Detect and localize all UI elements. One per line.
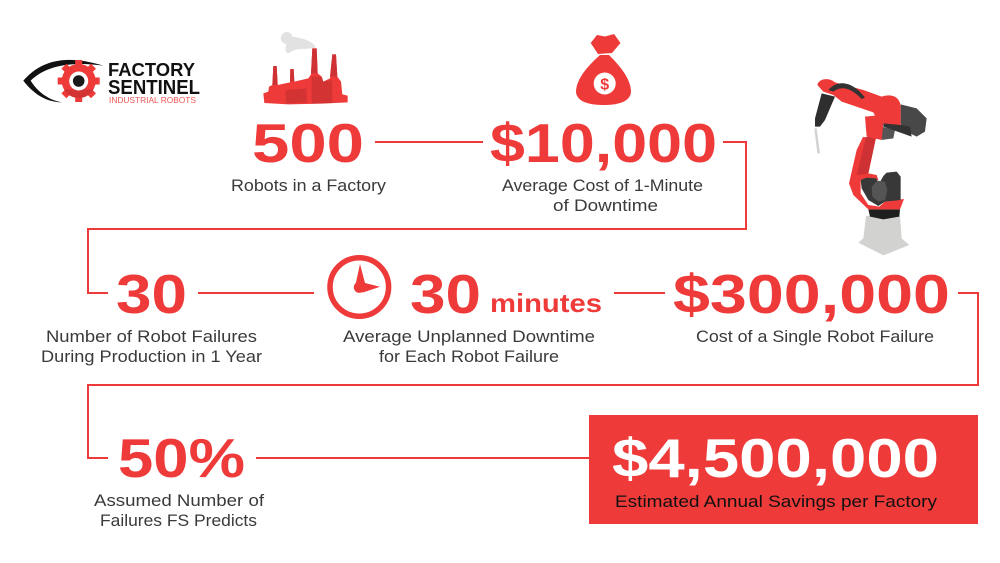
stat: 30 minutes: Average Unplanned Downtime — [343, 327, 595, 346]
stat: 30 minutes — [343, 263, 602, 366]
stat: $300,000 — [673, 263, 950, 346]
panel: estimated annual savings: Estimated Annual Savings per Factory — [615, 492, 938, 511]
icon: clock — [330, 258, 389, 316]
stat: 30 minutes: 30 — [410, 263, 481, 325]
stat: 30 failures — [41, 263, 262, 366]
logo: Factory Sentinel — [23, 60, 200, 105]
factory building — [263, 48, 348, 104]
stat: 30 minutes: for Each Robot Failure — [379, 347, 559, 366]
logo: Factory Sentinel: SENTINEL — [108, 77, 200, 99]
stat: 50%: Assumed Number of — [94, 491, 264, 510]
icon: money bag — [576, 34, 631, 105]
stat: 30 failures: Number of Robot Failures — [46, 327, 257, 346]
logo gear — [58, 60, 100, 102]
logo eye outline — [23, 60, 103, 102]
stat: 30 failures: During Production in 1 Year — [41, 347, 262, 366]
logo: Factory Sentinel: INDUSTRIAL ROBOTS — [109, 95, 196, 105]
icon: robot arm — [814, 79, 927, 255]
factory smoke — [281, 32, 316, 53]
stat: $300,000: Cost of a Single Robot Failure — [696, 327, 934, 346]
robot upper arm and tool — [814, 79, 927, 153]
panel: estimated annual savings — [589, 415, 978, 524]
stat: 50%: 50% — [118, 427, 245, 489]
icon: factory — [263, 32, 348, 104]
stat: 500 robots: 500 — [252, 112, 364, 174]
stat: $10,000: of Downtime — [553, 196, 658, 215]
stat: 50%: Failures FS Predicts — [100, 511, 257, 530]
stat: $10,000: $10,000 — [490, 112, 717, 174]
panel: estimated annual savings: $4,500,000 — [612, 427, 939, 489]
stat: 50% — [94, 427, 264, 530]
icon: money bag: $ — [600, 76, 609, 94]
stat: 500 robots: Robots in a Factory — [231, 176, 387, 195]
logo wordmark: FACTORY — [108, 60, 195, 80]
stat: $300,000: $300,000 — [673, 263, 950, 325]
stat: 30 minutes: minutes — [490, 288, 602, 318]
connector lines — [88, 142, 978, 458]
robot base and lower arm — [849, 137, 909, 255]
stat: 30 failures: 30 — [116, 263, 187, 325]
stat: $10,000 — [490, 112, 717, 215]
stat: $10,000: Average Cost of 1-Minute — [502, 176, 703, 195]
stat: 500 robots — [231, 112, 387, 195]
